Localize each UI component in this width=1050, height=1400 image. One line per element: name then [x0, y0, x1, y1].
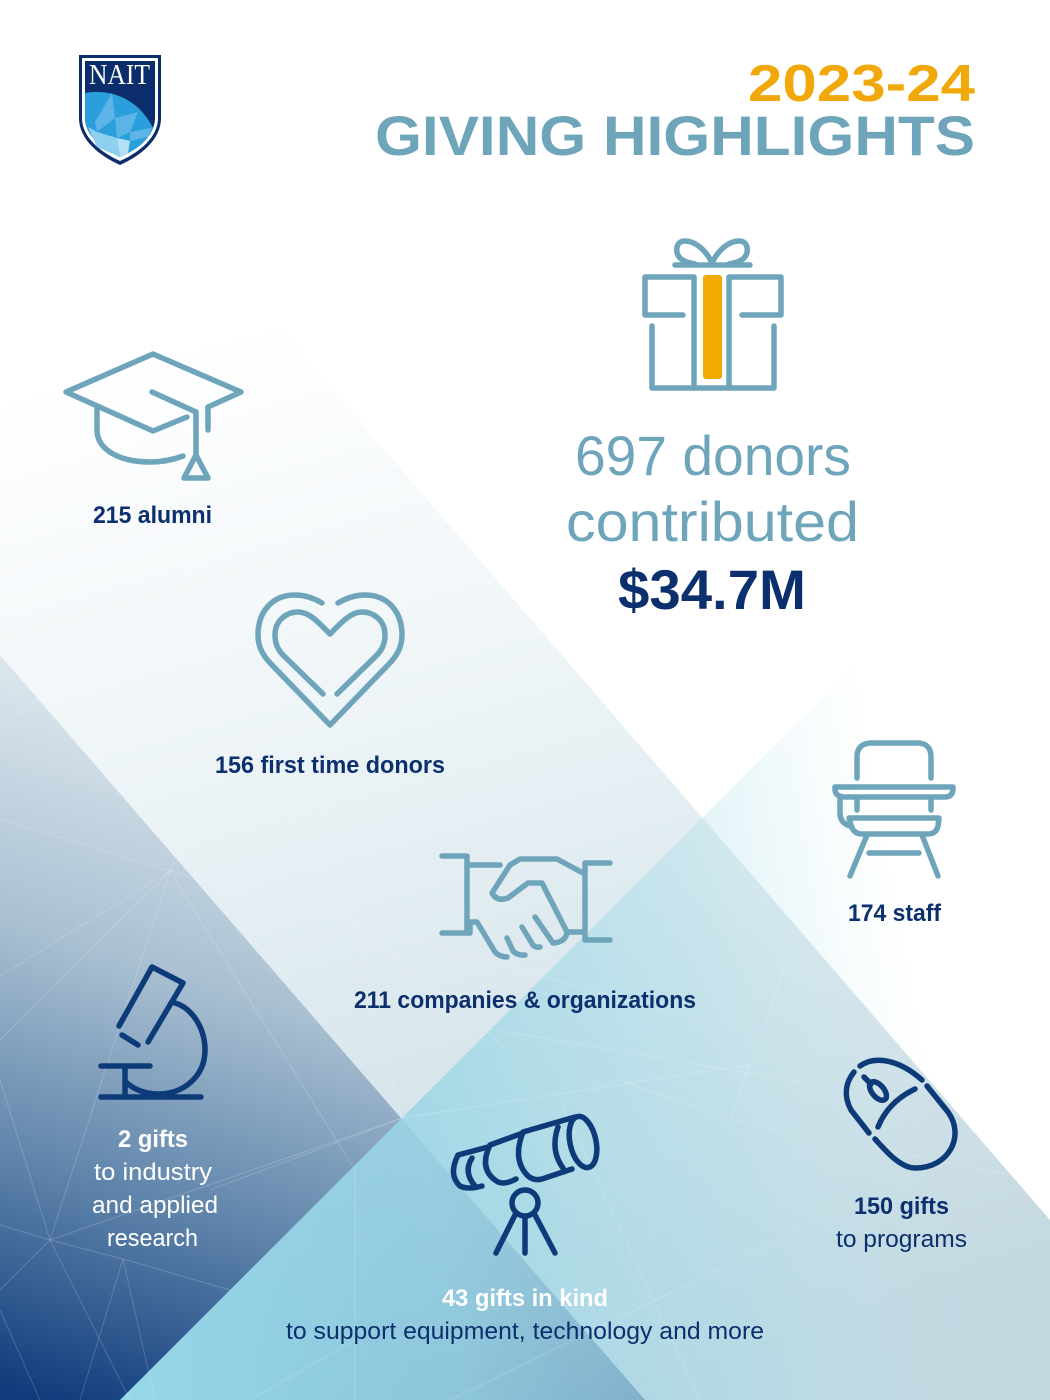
- main statement: [566, 424, 859, 621]
- label: first time donors: 156 first time donors: [215, 752, 445, 779]
- icon: handshake: [442, 856, 610, 957]
- label: gifts to research: research: [107, 1225, 198, 1252]
- label: gifts in kind: 43 gifts in kind: [442, 1285, 608, 1312]
- label: companies: 211 companies & organizations: [354, 987, 696, 1014]
- title: GIVING HIGHLIGHTS: [375, 104, 975, 167]
- label: gifts to research: 2 gifts: [118, 1126, 188, 1153]
- icon: telescope: [453, 1114, 601, 1253]
- icon: computer mouse: [846, 1060, 955, 1168]
- label: alumni: 215 alumni: [93, 502, 212, 529]
- label: gifts to research: [92, 1126, 218, 1252]
- main statement: 697 donors: [575, 424, 851, 487]
- logo: NAIT shield: NAIT: [89, 59, 150, 91]
- label: gifts to programs: to programs: [836, 1226, 967, 1253]
- label: gifts in kind: [286, 1285, 764, 1345]
- label: gifts to programs: 150 gifts: [854, 1193, 949, 1220]
- logo: NAIT shield: [79, 55, 161, 165]
- icon: school desk: [835, 743, 953, 876]
- label: gifts to research: to industry: [94, 1159, 212, 1186]
- label: gifts to programs: [836, 1193, 967, 1253]
- title: [375, 55, 975, 167]
- icon: heart: [258, 595, 402, 725]
- title: 2023-24: [748, 55, 975, 113]
- main statement: contributed: [566, 490, 859, 553]
- icon: graduation cap: [66, 354, 241, 478]
- label: gifts to research: and applied: [92, 1192, 218, 1219]
- icon: microscope: [101, 967, 205, 1097]
- label: gifts in kind: to support equipment, technology and more: [286, 1318, 764, 1345]
- icon: gift: [645, 241, 781, 388]
- main statement: $34.7M: [618, 558, 806, 621]
- label: staff: 174 staff: [848, 900, 942, 927]
